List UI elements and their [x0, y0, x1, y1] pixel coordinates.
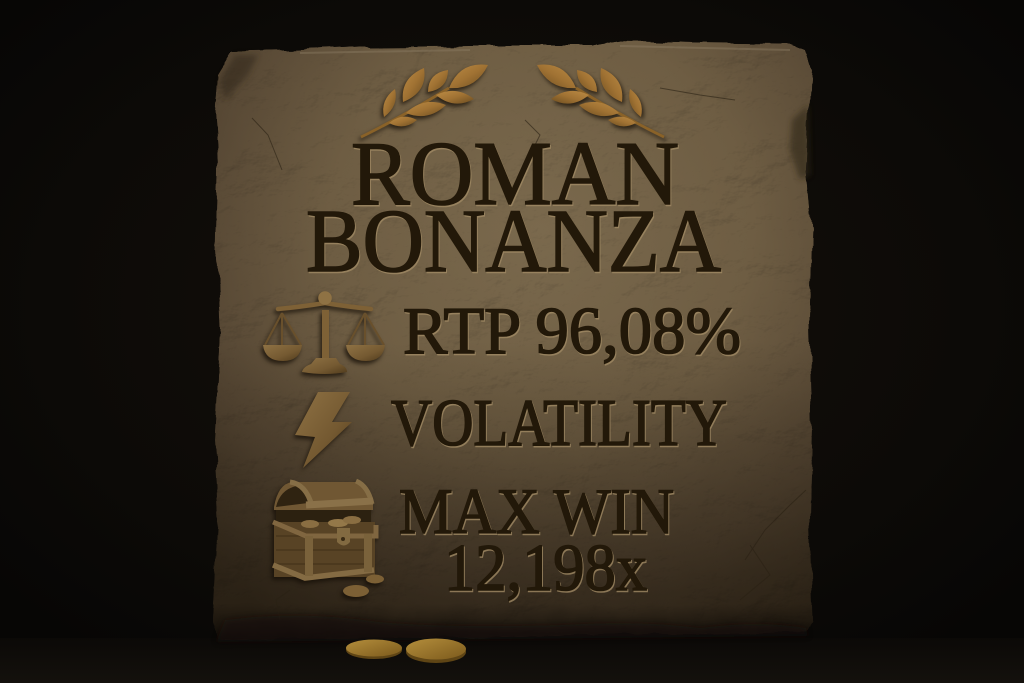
- icon: treasure chest: [273, 481, 376, 578]
- stone cracks and chips: [252, 88, 806, 620]
- title: ROMAN: [351, 123, 679, 224]
- icon: lightning bolt: [295, 392, 352, 468]
- dark lower edge shadow: [216, 615, 808, 642]
- icon: balance scales: [263, 291, 385, 374]
- chipped top left corner: [220, 55, 258, 100]
- title: BONANZA: [306, 192, 721, 291]
- chipped right edge: [790, 105, 810, 180]
- icon: right laurel branch: [537, 64, 664, 137]
- icon: left laurel branch: [361, 64, 488, 137]
- icon: small coins beside chest: [343, 574, 384, 597]
- title: [306, 123, 721, 291]
- stat: volatility: VOLATILITY: [391, 386, 727, 460]
- chest lid: [274, 482, 373, 510]
- panel: stone tablet: [212, 41, 813, 640]
- stat: max win: 12,198x: [444, 531, 647, 605]
- chest treasure: [301, 520, 319, 528]
- stat: max win: MAX WIN: [399, 476, 674, 548]
- stat: max win: [399, 476, 674, 605]
- lit top edge: [300, 46, 790, 53]
- chest latch: [337, 528, 350, 546]
- chest body: [274, 522, 375, 577]
- stat: RTP: RTP 96,08%: [403, 294, 741, 368]
- chest interior: [276, 505, 371, 527]
- icon: gold coins on floor: [346, 638, 466, 663]
- floor: [0, 638, 1024, 683]
